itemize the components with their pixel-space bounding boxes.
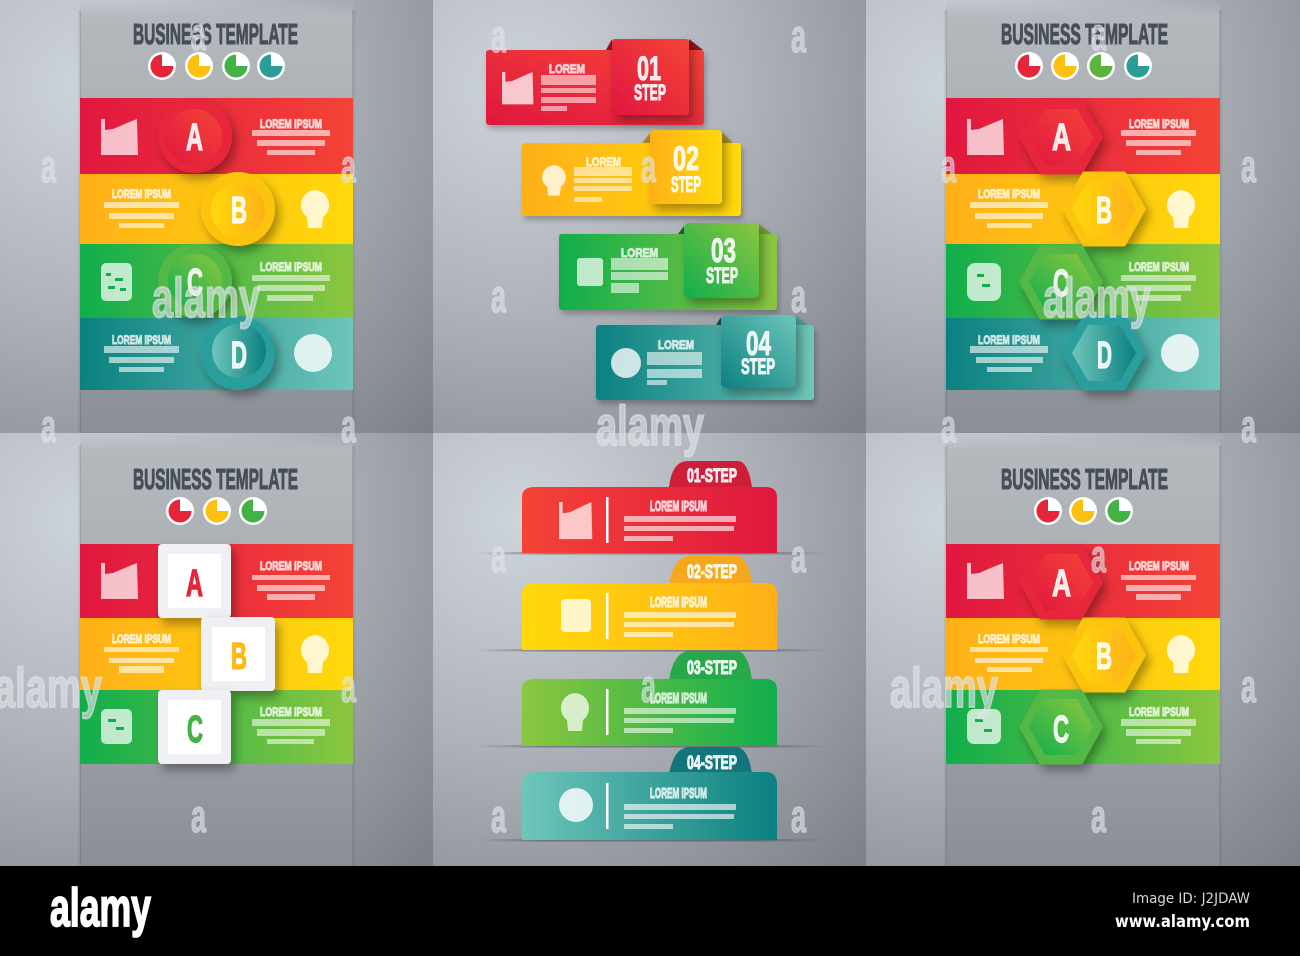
band: teal [80, 318, 353, 390]
icon: bulb [1167, 635, 1195, 673]
text block A [252, 117, 330, 155]
legend dots [148, 52, 285, 80]
row 03 [522, 651, 777, 746]
badge A [1019, 544, 1103, 620]
row 04: 04-STEP [687, 753, 737, 774]
band: green [946, 244, 1220, 318]
card 02: 02 [673, 140, 699, 178]
watermarks: a [341, 660, 356, 712]
watermarks: a [341, 140, 356, 192]
watermarks: a [641, 140, 656, 192]
legend dots [1015, 52, 1152, 80]
badge C [1019, 690, 1103, 764]
badge A: A [186, 117, 203, 159]
card 03: 03 [711, 232, 736, 270]
card B: B [231, 636, 247, 678]
badge C [158, 244, 232, 318]
text block D: LOREM IPSUM [112, 333, 171, 347]
watermarks: alamy [596, 394, 704, 457]
watermarks: a [1091, 530, 1106, 582]
legend dots [166, 497, 267, 525]
text block C: LOREM IPSUM [1129, 260, 1189, 274]
icon: chart [967, 563, 1004, 599]
band: green [80, 244, 353, 318]
watermarks: a [491, 530, 506, 582]
text block C: LOREM IPSUM [1129, 705, 1189, 719]
panel: circles A-D [77, 0, 356, 433]
row 02: 02-STEP [687, 562, 737, 583]
text block B: LOREM IPSUM [112, 632, 171, 646]
badge A: A [1052, 563, 1071, 605]
text block B [970, 187, 1048, 228]
watermarks: a [1241, 400, 1256, 452]
badge B: B [1096, 636, 1112, 678]
panel: hexagons A-D [943, 0, 1223, 433]
card 03 [559, 223, 777, 310]
icon: face [101, 263, 132, 301]
text block A: LOREM IPSUM [1129, 559, 1189, 573]
watermarks: a [41, 140, 56, 192]
badge D [201, 316, 275, 390]
watermarks: a [1241, 140, 1256, 192]
band: red [80, 544, 353, 618]
legend dots [1034, 497, 1133, 525]
footer logo: alamy [50, 878, 151, 938]
panel: white squares A-C [77, 433, 356, 866]
card 02 [522, 130, 741, 216]
text block D: LOREM IPSUM [978, 333, 1040, 347]
card C: C [187, 709, 203, 751]
watermarks: a [191, 8, 206, 60]
image id: Image ID: J2JDAW [1132, 891, 1250, 907]
badge B: B [1096, 190, 1112, 232]
icon: chart [101, 119, 138, 155]
row 04 [522, 747, 777, 840]
text block C [252, 260, 330, 301]
watermarks: a [191, 790, 206, 842]
title: BUSINESS TEMPLATE [133, 464, 298, 496]
panel: step cards [486, 39, 814, 400]
card 04: LOREM [658, 338, 694, 352]
band: yellow [80, 618, 353, 690]
watermarks: a [491, 790, 506, 842]
panel: tabbed list [477, 461, 827, 842]
icon: face [967, 263, 1001, 301]
row 03: LOREM IPSUM [650, 690, 707, 707]
slot shadows [477, 552, 827, 842]
text block B [104, 187, 179, 228]
card A [158, 544, 231, 618]
text block B [104, 632, 179, 673]
band: yellow [80, 174, 353, 244]
watermarks: a [491, 270, 506, 322]
row 01 [522, 461, 777, 553]
badge D: D [1097, 335, 1112, 377]
text block B: LOREM IPSUM [978, 632, 1040, 646]
row 03: 03-STEP [687, 658, 737, 679]
band: green [80, 690, 353, 764]
text block A [1121, 117, 1196, 155]
text block B: LOREM IPSUM [112, 187, 171, 201]
watermarks: a [41, 400, 56, 452]
badge C: C [1053, 263, 1069, 305]
row 02 [522, 556, 777, 650]
band: teal [946, 318, 1220, 390]
card 01 [486, 39, 704, 125]
icon: bulb [301, 190, 329, 228]
card 03: STEP [706, 263, 738, 288]
text block A: LOREM IPSUM [260, 117, 322, 131]
text block B [970, 632, 1048, 672]
row 01: LOREM IPSUM [650, 498, 707, 515]
text block C [252, 705, 330, 744]
title: BUSINESS TEMPLATE [133, 19, 298, 51]
badge C [1019, 244, 1103, 320]
text block C: LOREM IPSUM [260, 705, 322, 719]
card A: A [186, 563, 203, 605]
text block D [104, 333, 179, 372]
card C [158, 690, 231, 764]
band: yellow [946, 174, 1220, 244]
badge D [1062, 316, 1146, 390]
badge C: C [187, 262, 203, 304]
band: red [946, 98, 1220, 174]
badge B [1062, 172, 1146, 246]
icon: bulb [1167, 190, 1195, 228]
card 04: 04 [746, 325, 771, 363]
website: www.alamy.com [1115, 912, 1250, 932]
card 04 [596, 315, 814, 400]
footer bar [0, 866, 1300, 956]
icon: chart [967, 119, 1004, 155]
band: green [946, 690, 1220, 764]
text block B: LOREM IPSUM [978, 187, 1040, 201]
row 01: 01-STEP [687, 466, 737, 487]
text block C [1121, 260, 1196, 301]
watermarks: alamy [152, 266, 260, 329]
card 01: 01 [637, 50, 661, 88]
badge B: B [231, 190, 247, 232]
text block A: LOREM IPSUM [1129, 117, 1189, 131]
band: yellow [946, 618, 1220, 690]
card 02: LOREM [586, 155, 621, 169]
watermarks: a [641, 660, 656, 712]
watermarks: a [791, 270, 806, 322]
icon: face [967, 709, 1001, 744]
text block A: LOREM IPSUM [260, 559, 322, 573]
watermarks: a [1091, 790, 1106, 842]
band: red [946, 544, 1220, 618]
text block C: LOREM IPSUM [260, 260, 322, 274]
card 01: LOREM [549, 62, 585, 76]
card B [201, 617, 275, 691]
watermarks: a [791, 790, 806, 842]
card 01: STEP [634, 80, 666, 105]
watermarks: a [491, 10, 506, 62]
badge A: A [1052, 117, 1071, 159]
badge C: C [1053, 709, 1069, 751]
badge A [1019, 100, 1103, 174]
watermarks: alamy [1043, 266, 1151, 329]
panel: hexagons A-C [943, 433, 1223, 866]
watermarks: a [791, 530, 806, 582]
row 02: LOREM IPSUM [650, 594, 707, 611]
icon: bulb [301, 635, 329, 673]
watermarks: a [1241, 660, 1256, 712]
row 04: LOREM IPSUM [650, 785, 707, 802]
text block D [970, 333, 1048, 372]
card 02: STEP [671, 172, 701, 197]
watermarks: a [341, 400, 356, 452]
watermarks: a [941, 400, 956, 452]
watermarks: a [941, 140, 956, 192]
badge A [158, 99, 232, 173]
icon: chart [101, 563, 138, 599]
icon: planet [1161, 334, 1199, 372]
band: red [80, 98, 353, 174]
card 04: STEP [741, 354, 775, 379]
text block A [252, 559, 330, 600]
text block C [1121, 705, 1196, 744]
badge B [201, 172, 275, 246]
text block A [1121, 559, 1196, 600]
badge D: D [231, 335, 247, 377]
badge B [1062, 618, 1146, 692]
watermarks: a [1091, 8, 1106, 60]
watermarks: alamy [890, 656, 998, 719]
card 03: LOREM [621, 246, 658, 260]
icon: planet [294, 334, 332, 372]
watermarks: a [791, 10, 806, 62]
icon: face [101, 709, 132, 744]
